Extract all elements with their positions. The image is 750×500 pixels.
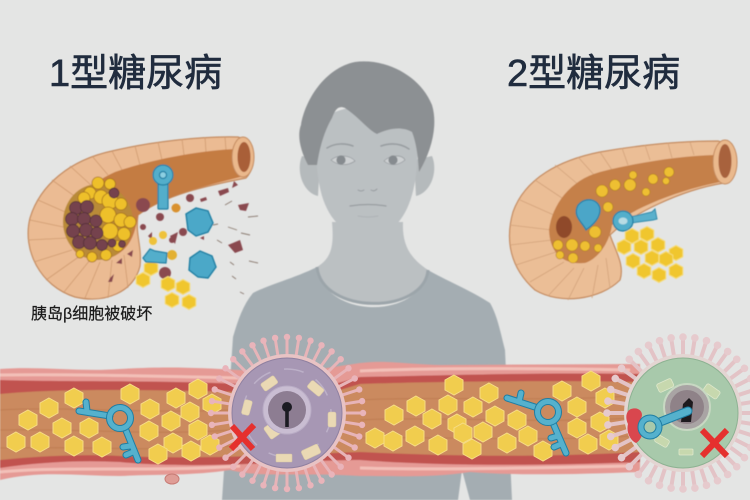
pancreas body — [28, 137, 253, 299]
receptor lock — [664, 384, 710, 430]
duct opening — [713, 140, 737, 184]
lock inner — [268, 391, 306, 429]
membrane — [624, 354, 742, 472]
title: type 2 diabetes: 2型糖尿病 — [507, 53, 680, 95]
ears — [300, 156, 434, 196]
vessel outer wall — [0, 362, 640, 480]
duct opening — [232, 137, 254, 177]
membrane — [228, 354, 346, 472]
facial features — [327, 144, 409, 217]
duct lumen — [238, 142, 250, 172]
insulin key: left vessel — [79, 402, 138, 460]
broken blue lump lower — [189, 251, 216, 278]
cell body — [628, 358, 738, 468]
pancreatic duct — [68, 149, 244, 259]
insulin key: right vessel — [507, 393, 566, 453]
vessel lumen — [0, 381, 640, 460]
scattered debris — [108, 181, 249, 282]
blue receptor blob — [576, 200, 600, 230]
lower wall highlight — [0, 466, 630, 472]
insulin hexagons: left vessel — [7, 379, 221, 464]
hair — [299, 61, 434, 172]
blue key in type 2 pancreas — [613, 209, 657, 231]
title: type 1 diabetes: 1型糖尿病 — [49, 53, 222, 95]
vessel inner wall: dark band — [0, 373, 640, 468]
cell body — [232, 358, 342, 468]
pancreas: type 1 with destroyed beta cells — [28, 137, 258, 310]
pancreas ridges — [510, 142, 694, 300]
spikes — [603, 333, 750, 493]
broken blue lump upper — [186, 208, 213, 236]
caption: beta cells destroyed: 胰岛β细胞被破坏 — [31, 305, 152, 323]
pancreas ridges — [28, 137, 226, 298]
face — [316, 106, 418, 236]
insulin key fragment: upright — [153, 165, 173, 209]
t-shirt — [222, 267, 512, 500]
broken key piece — [143, 249, 167, 263]
islet yellow cells — [553, 167, 674, 263]
islet cells: dark destroyed — [66, 188, 126, 250]
vessel bump — [165, 474, 179, 484]
red X: key blocked at cell 2 — [702, 430, 727, 456]
keyhole — [282, 402, 292, 427]
lock inner — [670, 390, 704, 424]
cell 1: purple cell with locked receptor — [208, 334, 366, 492]
receptor lock — [263, 386, 311, 434]
vesicles — [654, 378, 721, 455]
insulin hexagons: right vessel — [366, 371, 618, 461]
cell 2: green cell with blocked receptor — [603, 333, 750, 493]
islet cells: yellow — [76, 177, 136, 262]
dark spot in islet — [556, 216, 572, 238]
insulin resistance red blob — [626, 408, 643, 443]
blood vessel — [0, 362, 640, 480]
insulin key inserted in cell 2 — [641, 411, 688, 436]
boy figure — [222, 61, 512, 500]
yellow hexagons — [617, 226, 683, 282]
pancreas: type 2 with insulin resistance — [509, 140, 737, 300]
vesicles — [241, 375, 336, 462]
islet backing — [63, 184, 133, 260]
red X: key rejected at cell 1 — [231, 425, 254, 449]
pancreas body — [509, 141, 733, 299]
pancreatic duct — [549, 155, 720, 263]
yellow hexagons released — [136, 204, 196, 310]
collar — [317, 267, 428, 303]
spikes — [208, 334, 366, 492]
keyhole dark — [681, 398, 693, 422]
duct lumen — [718, 144, 732, 178]
neck — [317, 222, 428, 303]
inner ring highlight — [243, 369, 331, 457]
upper wall highlight — [0, 369, 630, 378]
lumen texture — [0, 396, 630, 449]
